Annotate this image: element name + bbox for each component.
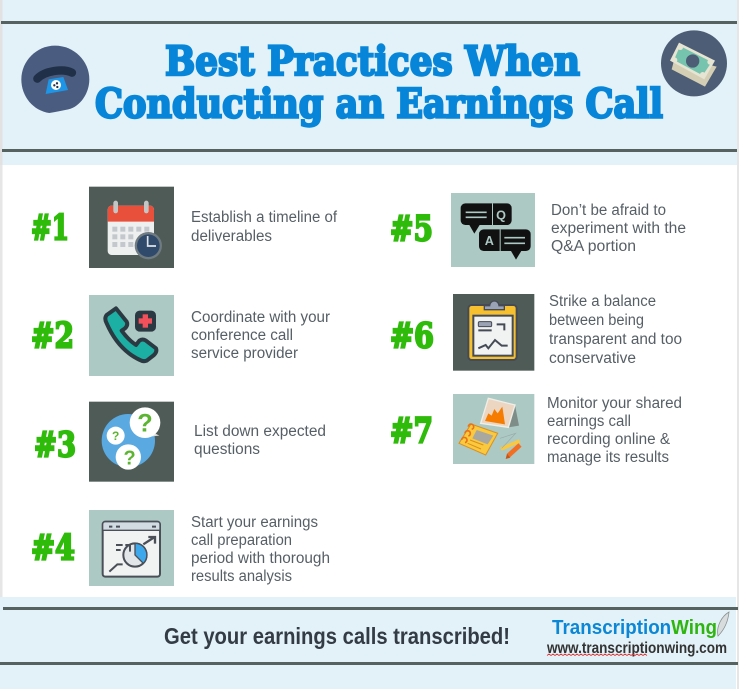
text 7: recording online & xyxy=(547,431,671,448)
item 3 xyxy=(34,402,326,482)
text 7 xyxy=(547,395,682,466)
item 2 xyxy=(31,295,330,376)
icon: Q and A bubbles xyxy=(451,193,535,267)
right page edge xyxy=(737,165,739,689)
icon: phone with cross xyxy=(89,295,174,376)
text 7: Monitor your shared xyxy=(547,395,682,412)
text 5: experiment with the xyxy=(551,220,686,237)
icon: question bubbles xyxy=(89,402,174,482)
footer band xyxy=(0,597,738,689)
text 7: earnings call xyxy=(547,413,631,430)
text 1: Establish a timeline of xyxy=(191,209,338,226)
header band xyxy=(0,0,739,165)
logo xyxy=(546,612,729,657)
call to action: Get your earnings calls transcribed! xyxy=(164,623,510,649)
text 5: Don’t be afraid to xyxy=(551,202,666,219)
number 5: #5 xyxy=(390,208,433,250)
white content edge xyxy=(0,165,2,598)
text 6: Strike a balance xyxy=(549,293,656,310)
item 5 xyxy=(390,193,686,267)
icon: question bubbles: ? xyxy=(137,410,153,438)
item 7 xyxy=(390,394,682,466)
number 7: #7 xyxy=(390,410,433,452)
text 6 xyxy=(549,293,682,367)
text 3: questions xyxy=(194,441,260,458)
number 4: #4 xyxy=(31,528,75,568)
icon: question bubbles: ? xyxy=(112,429,119,443)
text 2 xyxy=(191,309,330,362)
title: Conducting an Earnings Call xyxy=(95,80,663,128)
icon: question bubbles: ? xyxy=(124,447,136,469)
number 3: #3 xyxy=(34,424,76,466)
number 6: #6 xyxy=(390,316,434,356)
icon: calendar with clock xyxy=(89,187,174,268)
icon: report and notebook xyxy=(453,394,534,464)
text 6: transparent and too xyxy=(549,331,682,348)
text 4: call preparation xyxy=(191,532,292,549)
item 6 xyxy=(390,293,682,371)
text 4: Start your earnings xyxy=(191,514,318,531)
text 1: deliverables xyxy=(191,228,272,245)
icon: analysis window xyxy=(89,510,174,586)
text 4: results analysis xyxy=(191,568,292,585)
icon: Q and A bubbles: A xyxy=(485,234,494,248)
icon: Q and A bubbles: Q xyxy=(496,208,506,222)
text 6: conservative xyxy=(549,350,636,367)
item 4 xyxy=(31,510,330,586)
number 2: #2 xyxy=(31,316,74,356)
text 4: period with thorough xyxy=(191,550,330,567)
icon: telephone xyxy=(21,46,89,113)
icon: clipboard xyxy=(453,294,534,371)
text 2: service provider xyxy=(191,345,298,362)
text 1 xyxy=(191,209,338,245)
title: Best Practices When xyxy=(165,38,580,85)
text 2: conference call xyxy=(191,327,293,344)
text 5: Q&A portion xyxy=(551,238,636,255)
text 5 xyxy=(551,202,686,255)
text 4 xyxy=(191,514,330,585)
text 2: Coordinate with your xyxy=(191,309,330,326)
title xyxy=(95,38,663,128)
icon: banknotes xyxy=(661,30,727,96)
item 1 xyxy=(31,187,338,268)
number 1: #1 xyxy=(31,208,69,248)
text 6: between being xyxy=(549,312,644,329)
text 3: List down expected xyxy=(194,423,326,440)
logo: TranscriptionWing xyxy=(552,617,717,639)
text 7: manage its results xyxy=(547,449,669,466)
text 3 xyxy=(194,423,326,458)
